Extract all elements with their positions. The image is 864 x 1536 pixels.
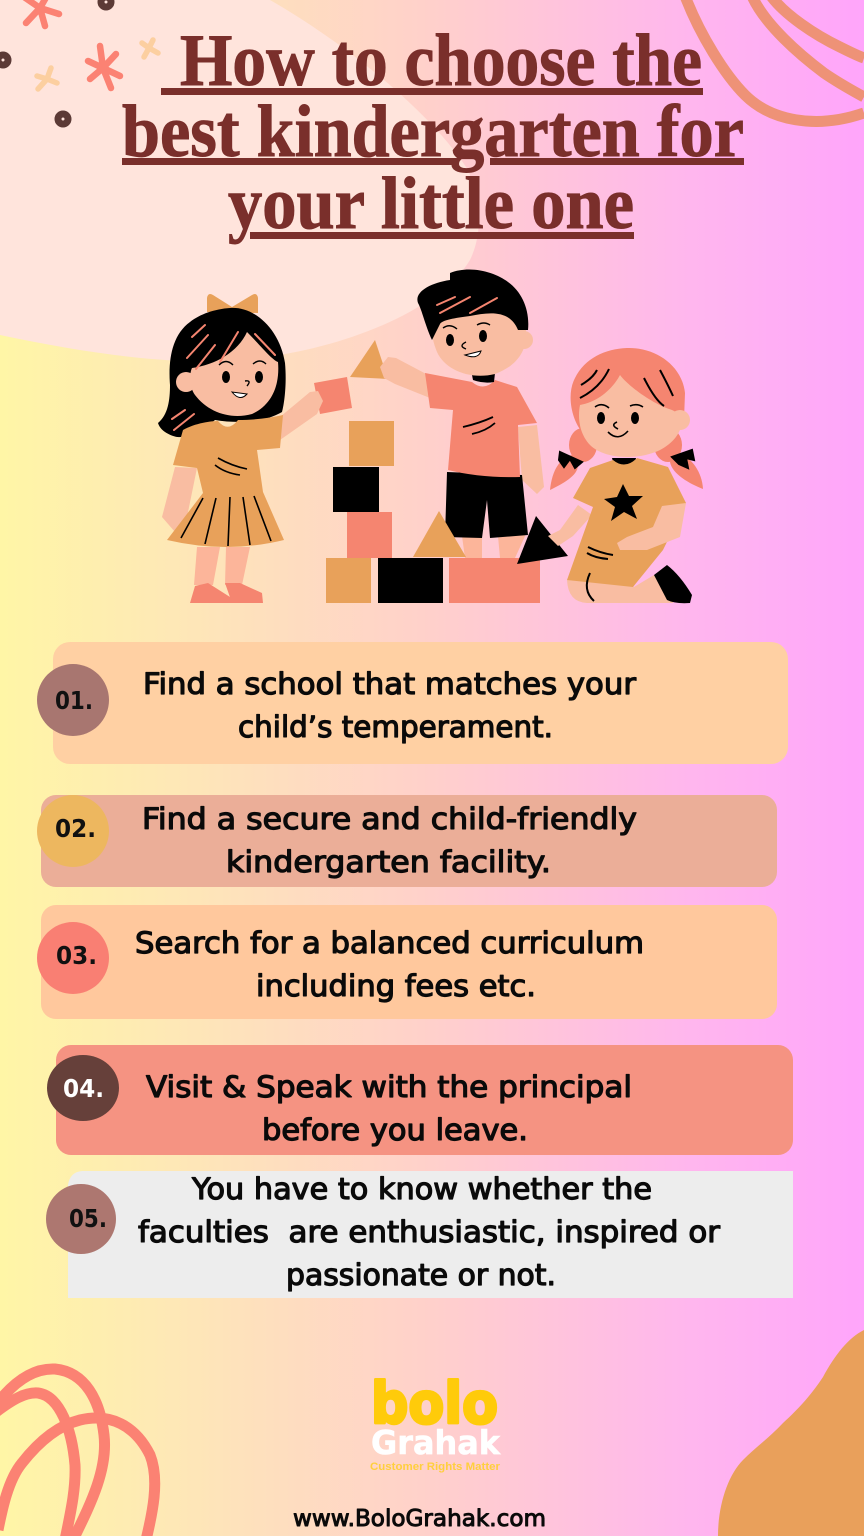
logo: bolo Grahak: bolo bbox=[371, 1371, 498, 1437]
step 02 bbox=[37, 795, 777, 887]
step 05 bbox=[46, 1171, 793, 1298]
decoration: stars and dots bbox=[0, 0, 158, 124]
step 01: 01. bbox=[55, 686, 93, 715]
title: best kindergarten for bbox=[122, 91, 744, 173]
title bbox=[122, 20, 744, 245]
step 05: faculties are enthusiastic, inspired or bbox=[138, 1215, 720, 1249]
step 02: 02. bbox=[55, 814, 96, 843]
title: How to choose the bbox=[180, 20, 702, 102]
decoration: bottom left swirl bbox=[0, 1369, 155, 1536]
step 03 bbox=[37, 905, 777, 1019]
girl with braids bbox=[548, 348, 703, 603]
front blocks bbox=[413, 511, 568, 603]
step 05: 05. bbox=[69, 1204, 107, 1233]
step 05: passionate or not. bbox=[286, 1258, 556, 1292]
step 01: child’s temperament. bbox=[238, 710, 553, 744]
website url: www.BoloGrahak.com bbox=[293, 1506, 546, 1532]
step 01 bbox=[37, 642, 788, 764]
step 02: Find a secure and child-friendly bbox=[142, 802, 637, 836]
decoration: bottom right blob bbox=[718, 1330, 864, 1536]
step 03: Search for a balanced curriculum bbox=[135, 926, 644, 960]
step 03: including fees etc. bbox=[256, 969, 536, 1003]
step 01: Find a school that matches your bbox=[143, 667, 636, 701]
step 05: You have to know whether the bbox=[191, 1172, 652, 1206]
title: your little one bbox=[228, 163, 634, 245]
boy bbox=[380, 270, 544, 558]
girl with bow bbox=[158, 294, 323, 603]
step 02: kindergarten facility. bbox=[226, 845, 551, 879]
step 04: 04. bbox=[63, 1074, 104, 1103]
step 04: Visit & Speak with the principal bbox=[146, 1070, 632, 1104]
background blob: top left bbox=[0, 0, 479, 361]
logo: bolo Grahak bbox=[370, 1371, 501, 1473]
step 04: before you leave. bbox=[262, 1113, 528, 1147]
decoration: top right swirl bbox=[685, 0, 864, 121]
illustration: children playing with blocks bbox=[158, 270, 703, 603]
step 03: 03. bbox=[56, 941, 97, 970]
logo: bolo Grahak: Customer Rights Matter bbox=[370, 1461, 501, 1473]
logo: bolo Grahak: Grahak bbox=[371, 1423, 501, 1462]
step 04 bbox=[47, 1045, 793, 1155]
building blocks bbox=[314, 340, 443, 603]
